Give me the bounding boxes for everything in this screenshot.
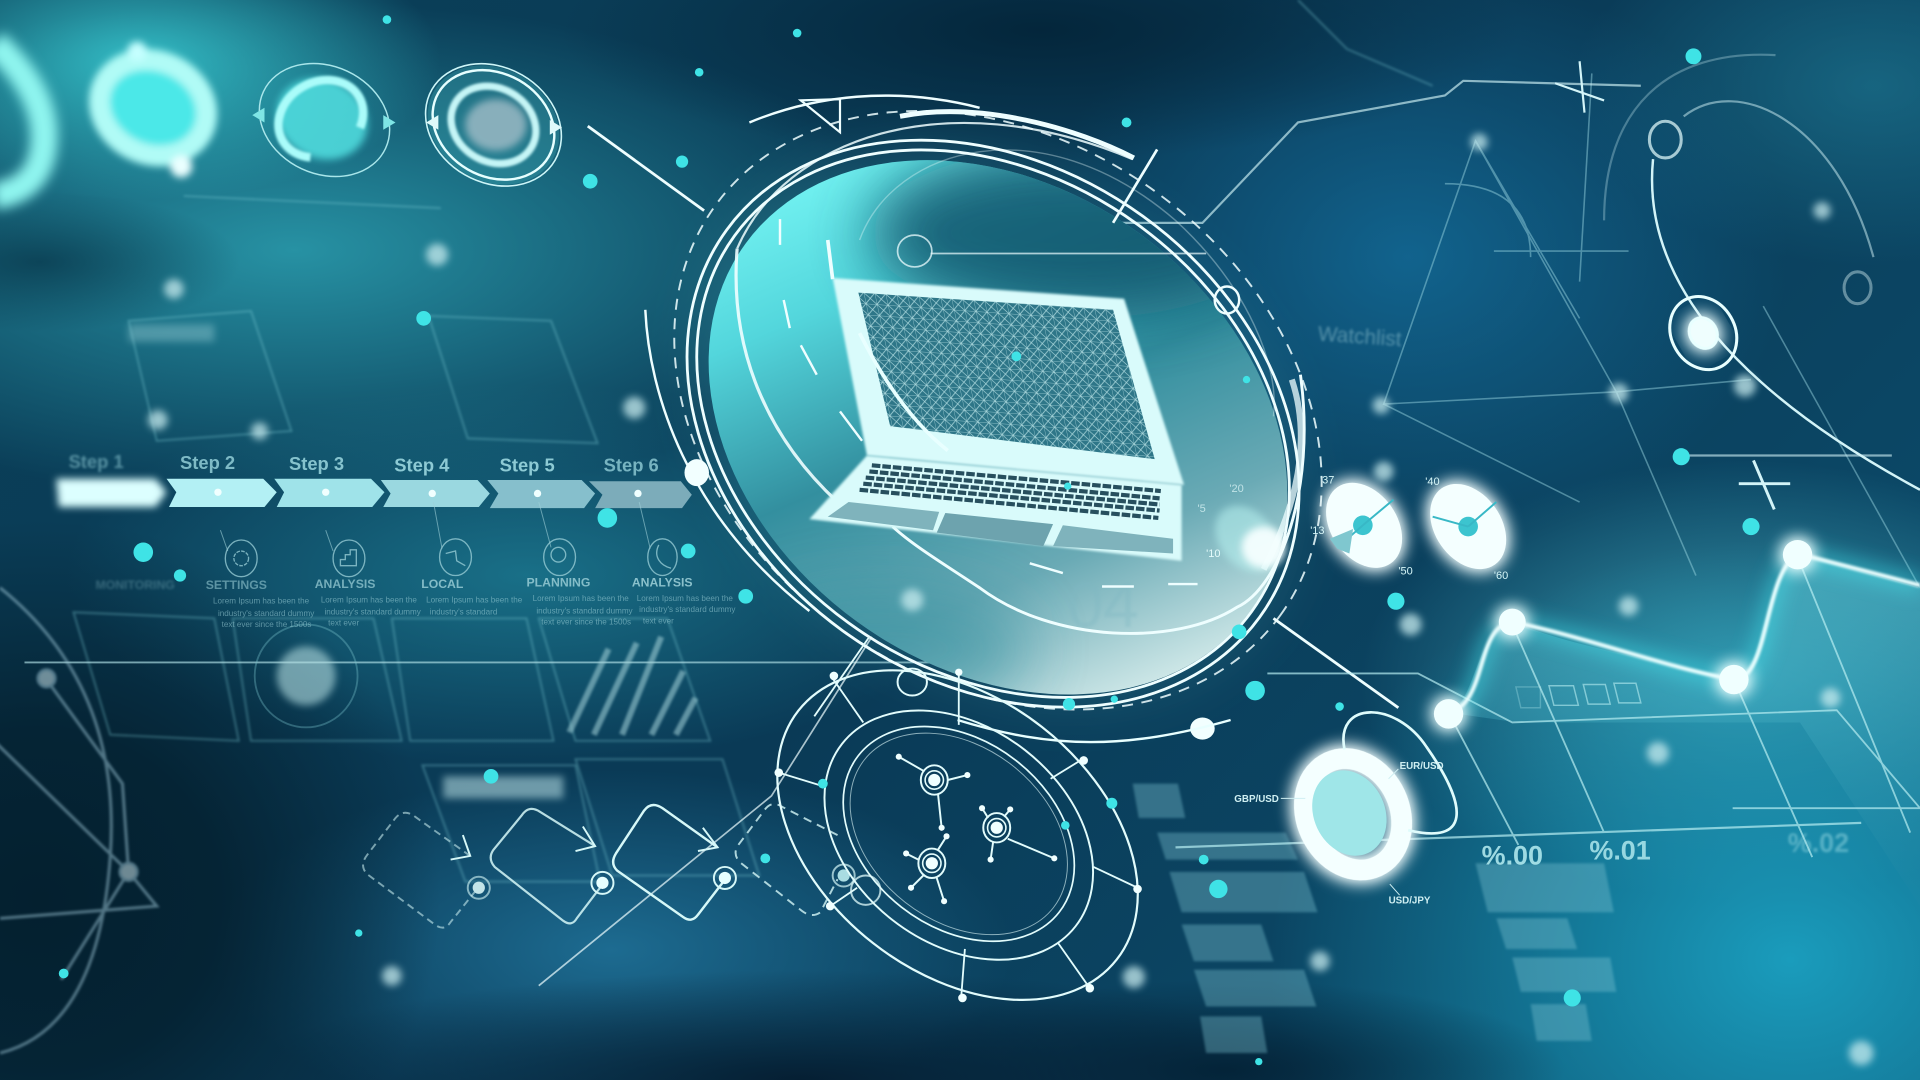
glow circle 2 [241, 43, 408, 197]
step titles: ANALYSIS [315, 577, 375, 591]
glow circle 3 [403, 40, 584, 210]
pie gauge details: '40 [1425, 476, 1440, 488]
disk shading: 04 [1068, 570, 1139, 641]
step titles: LOCAL [421, 577, 464, 591]
pie gauge details: '37 [1320, 475, 1334, 487]
disk shading [735, 147, 1286, 710]
glow arc far left [0, 43, 44, 196]
glow circle 1 [78, 36, 228, 179]
step descriptions: industry's standard dummy [324, 608, 422, 617]
step descriptions: text ever since the 1500s [541, 617, 631, 626]
blurred radial gauge [255, 624, 358, 727]
small pie gauge inside disk: '20 [1229, 483, 1244, 495]
blurred table block [443, 776, 563, 798]
step descriptions: text ever [328, 619, 359, 628]
chart area fill [1449, 553, 1920, 906]
long horizontal rule [24, 661, 1010, 663]
axis labels: %.00 [1482, 840, 1543, 870]
laptop palm rest [828, 502, 1173, 553]
blurred background panels [73, 0, 1433, 882]
step process bar [56, 451, 736, 629]
soft white bokeh dots [148, 133, 1873, 1065]
donut gauge: USD/JPY [1389, 896, 1431, 907]
step titles: PLANNING [527, 576, 590, 590]
donut gauge: GBP/USD [1234, 794, 1279, 805]
step descriptions [213, 594, 736, 629]
chart nodes [1434, 540, 1812, 729]
axis labels: %.01 [1589, 836, 1651, 866]
right background wireframe lines [1384, 73, 1920, 588]
chart line glow [1449, 553, 1920, 713]
lower network dial [714, 603, 1201, 1068]
pie gauge details: '60 [1494, 570, 1508, 582]
step labels: Step 3 [289, 453, 344, 474]
disk ring handle dot [684, 459, 709, 486]
step titles: ANALYSIS [632, 576, 693, 590]
line chart [1176, 540, 1920, 906]
blurred header bar [129, 324, 214, 342]
top right HUD lines [1113, 55, 1920, 509]
pie gauge details: '50 [1398, 565, 1413, 577]
watchlist label: Watchlist [1317, 322, 1402, 351]
step descriptions: text ever since the 1500s [222, 620, 311, 629]
step descriptions: industry's standard dummy [218, 609, 315, 618]
axis labels [1482, 828, 1849, 870]
step labels: Step 4 [394, 454, 450, 475]
step labels: Step 5 [500, 454, 555, 475]
small pie gauge inside disk: '10 [1206, 548, 1220, 560]
network nodes [899, 757, 1054, 901]
step descriptions: text ever [643, 616, 674, 625]
bottom right blurred bars [1133, 784, 1616, 1053]
lower ring handle dot [958, 718, 1231, 742]
step titles: MONITORING [96, 578, 175, 592]
step labels: Step 1 [69, 451, 124, 472]
step descriptions: Lorem Ipsum has been the [213, 597, 310, 606]
step labels: Step 2 [180, 452, 235, 473]
chart grid [1176, 557, 1920, 857]
step icons [225, 539, 677, 577]
axis labels: %.02 [1788, 828, 1849, 858]
chart boxes [1516, 683, 1641, 708]
pie gauges [1310, 468, 1522, 584]
lower arrow flow [363, 804, 855, 928]
donut gauge: EUR/USD [1400, 761, 1444, 772]
step descriptions: Lorem Ipsum has been the [533, 594, 629, 603]
top right target node [1649, 121, 1871, 382]
striped panel [569, 637, 696, 735]
step connector lines [220, 502, 650, 551]
step descriptions: Lorem Ipsum has been the [637, 594, 733, 603]
small pie gauge inside disk: '5 [1198, 503, 1206, 515]
left wireframe triangle [0, 588, 157, 1053]
step descriptions: industry's standard dummy [536, 606, 634, 615]
step descriptions: industry's standard dummy [639, 605, 736, 614]
step labels: Step 6 [604, 454, 659, 475]
laptop keyboard [860, 465, 1161, 518]
small pie gauge inside disk [1198, 483, 1291, 584]
chart line [1449, 553, 1920, 713]
main disk [538, 94, 1400, 986]
network end points [774, 669, 1142, 1002]
step labels [69, 451, 659, 475]
step descriptions: industry's standard [430, 608, 497, 617]
disk ring lines [539, 0, 1439, 986]
step titles: SETTINGS [206, 578, 267, 592]
donut gauge [1234, 712, 1457, 907]
pie gauge details: '13 [1310, 525, 1325, 537]
pie gauge details [1310, 475, 1508, 582]
laptop base [809, 456, 1182, 561]
step descriptions: Lorem Ipsum has been the [321, 595, 417, 604]
laptop [809, 278, 1184, 561]
laptop screen [833, 278, 1184, 485]
step titles [96, 576, 693, 592]
top left glowing circles [0, 36, 584, 210]
step chevrons [56, 479, 692, 508]
step descriptions: Lorem Ipsum has been the [426, 595, 523, 604]
